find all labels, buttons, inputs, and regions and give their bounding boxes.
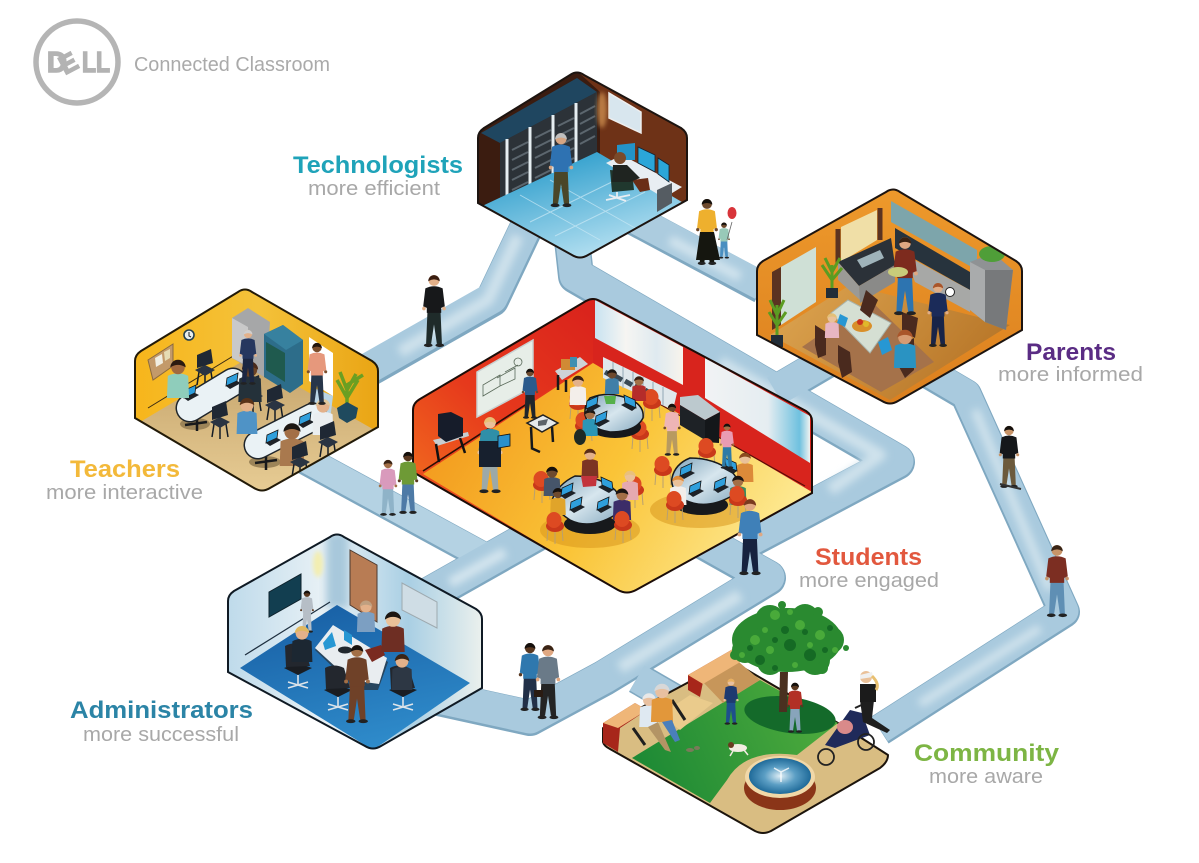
- panel: technologists room: [477, 72, 688, 258]
- floor: [770, 285, 1010, 400]
- label: Administrators: [70, 697, 253, 746]
- wall left: [603, 703, 647, 752]
- panel: administrators room: [222, 528, 488, 754]
- man in doorway: [307, 343, 327, 405]
- label: Parents: Parents: [1026, 339, 1116, 366]
- label: Teachers: Teachers: [70, 456, 180, 483]
- walkway: classroom to administrators: [425, 531, 540, 596]
- boy at whiteboard: [522, 369, 538, 419]
- clock: [184, 330, 194, 340]
- connecting walkways: [300, 211, 1064, 730]
- walkway: classroom to community and administrators: [425, 536, 768, 717]
- stroller: [818, 702, 874, 765]
- Dell logo: LL: [82, 47, 110, 79]
- standing presenter: [300, 591, 314, 633]
- person: woman walking: [422, 275, 446, 347]
- fountain: [744, 756, 816, 810]
- technologist standing: [549, 133, 573, 207]
- walkway: teachers to technologists: [360, 218, 530, 373]
- floor: [423, 363, 812, 596]
- glass door: [781, 247, 816, 325]
- window: [609, 93, 641, 133]
- walkway: parents branch: [775, 347, 850, 391]
- floor: [142, 362, 372, 490]
- label: Technologists: [293, 152, 463, 200]
- label: Administrators: more successful: [83, 724, 239, 746]
- walkway: parents to community: [880, 364, 1064, 729]
- label: Community: more aware: [929, 766, 1043, 788]
- refrigerator: [232, 308, 270, 378]
- elderly couple on bench: [633, 684, 685, 752]
- podium: [527, 415, 558, 452]
- label: Community: [914, 740, 1060, 788]
- bookshelf table: [555, 357, 588, 392]
- jogger: [860, 671, 890, 733]
- person: mother on path: [696, 199, 720, 265]
- walkway: technologists to parents: [620, 211, 762, 286]
- round table two: [533, 449, 644, 548]
- door: [350, 550, 377, 622]
- label: Administrators: Administrators: [70, 697, 253, 724]
- round table three: [650, 438, 753, 528]
- printer table: [433, 412, 469, 462]
- person: two students walking: [379, 452, 418, 516]
- sand plaza patches: [660, 695, 713, 730]
- boy with ball: [787, 683, 803, 733]
- walkway edges: [300, 212, 1064, 730]
- dog: [728, 742, 748, 756]
- person: two professionals: [519, 643, 560, 719]
- panel: community park: [603, 601, 890, 833]
- girl in pink: [720, 424, 734, 469]
- panel: students classroom: [405, 290, 820, 600]
- Dell logo: D: [47, 47, 67, 79]
- label: Technologists: Technologists: [293, 152, 463, 179]
- bulletin board: [148, 344, 173, 380]
- label: Community: Community: [914, 740, 1060, 767]
- Dell logo: [36, 21, 118, 103]
- whiteboard: [477, 340, 533, 417]
- table one: [180, 373, 241, 431]
- dining chairs: [815, 290, 918, 378]
- seated man: [894, 330, 916, 368]
- walkway: teachers to administrators: [300, 456, 482, 555]
- wall lights: [313, 551, 323, 577]
- window: [841, 210, 877, 262]
- rug: [802, 300, 934, 392]
- label: Parents: [998, 339, 1143, 386]
- vending machine: [264, 325, 303, 393]
- light glow: [597, 92, 607, 128]
- wall back: [688, 649, 747, 697]
- walkway: technologists around classroom: [572, 240, 897, 539]
- plant: [337, 372, 363, 423]
- heading: Connected Classroom: Connected Classroom: [134, 54, 330, 76]
- label: Teachers: more interactive: [46, 482, 203, 504]
- round table one: [569, 369, 661, 452]
- standing woman: [344, 645, 370, 723]
- server wall: [478, 71, 600, 215]
- wall TV: [269, 574, 301, 617]
- label: Students: more engaged: [799, 570, 939, 592]
- running boy: [723, 679, 739, 725]
- mother with tray: [892, 237, 918, 315]
- person: child with balloon: [718, 207, 736, 259]
- lawn: [632, 680, 838, 803]
- cubby shelves: [603, 357, 677, 410]
- sink island: [838, 238, 895, 303]
- copier: [680, 395, 720, 443]
- label: Students: Students: [815, 544, 922, 571]
- boy with soccer ball: [927, 283, 949, 347]
- Dell logo: E: [54, 46, 83, 80]
- blue floor: [240, 605, 470, 750]
- table two: [249, 412, 314, 470]
- label: Technologists: more efficient: [308, 178, 440, 200]
- seated operator: [606, 152, 650, 201]
- man in suit: [239, 330, 257, 385]
- seated teachers: [167, 360, 189, 398]
- right wall: [593, 298, 812, 495]
- person: skateboarder: [999, 426, 1021, 489]
- cabinets: [891, 201, 977, 270]
- label: Students: [799, 544, 939, 592]
- panel: parents kitchen room: [756, 188, 1023, 404]
- dining table: [831, 300, 892, 355]
- person: man at classroom corner: [737, 499, 763, 575]
- back chairs: [195, 349, 215, 387]
- window: [402, 583, 437, 628]
- floor: [478, 152, 687, 262]
- label: Teachers: [46, 456, 203, 504]
- panel: teachers lounge room: [130, 285, 385, 495]
- conference table: [315, 625, 388, 690]
- monitoring desk: [606, 143, 682, 212]
- doorway: [309, 337, 333, 396]
- teacher with tablet: [477, 417, 510, 493]
- walkway: community bench branch: [637, 678, 682, 704]
- birds: [686, 746, 700, 752]
- refrigerator: [970, 246, 1013, 330]
- tree: [730, 601, 849, 712]
- left wall: [413, 298, 593, 470]
- tree shadow: [742, 691, 838, 739]
- person: man on path: [1045, 545, 1069, 617]
- plants: [769, 258, 842, 347]
- label: Parents: more informed: [998, 364, 1143, 386]
- seated girl: [825, 313, 839, 338]
- wall corner shade: [326, 533, 348, 608]
- executive chairs and people: [284, 644, 312, 688]
- pupil by table: [663, 404, 681, 456]
- park base: [603, 660, 888, 833]
- windows: [595, 300, 683, 385]
